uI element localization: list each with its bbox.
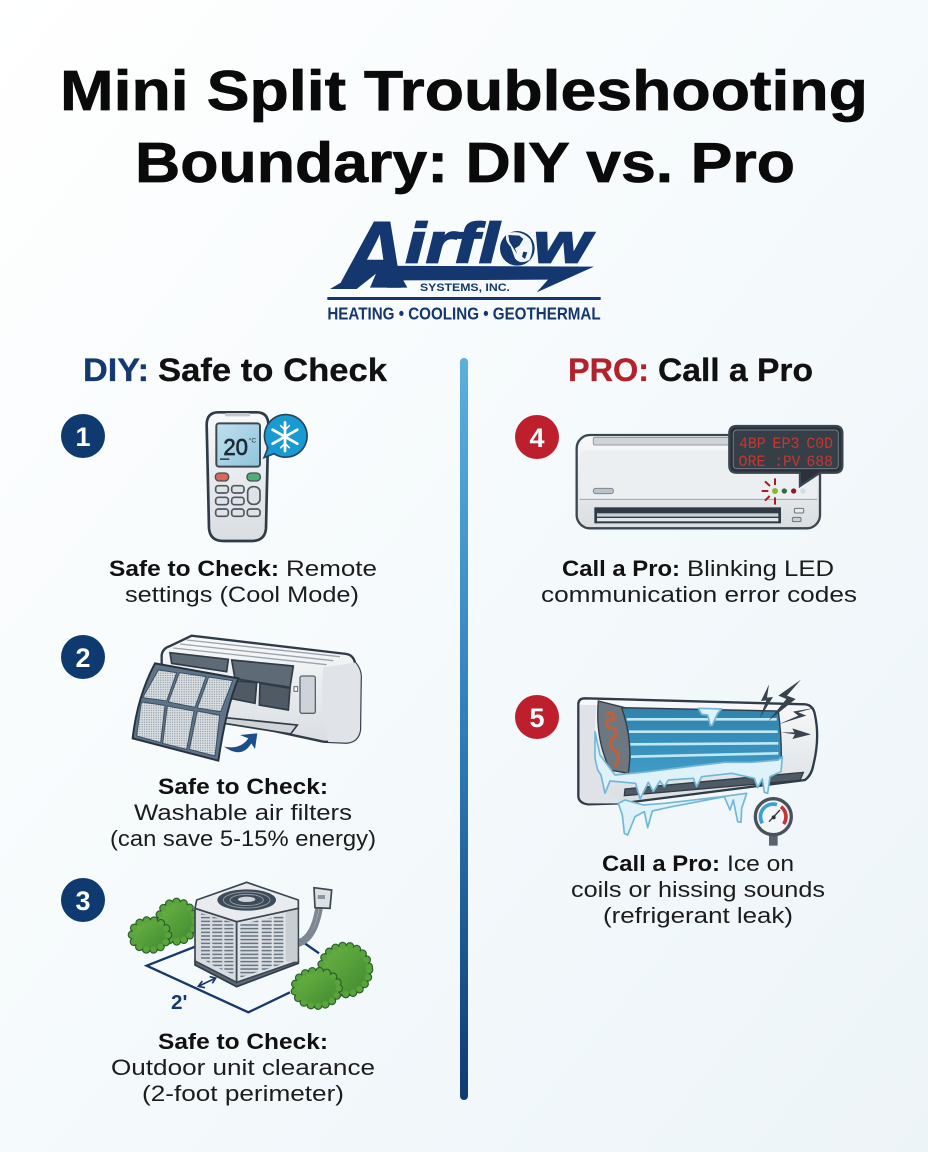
arrow: filter direction — [224, 733, 257, 752]
text: remote settings — [109, 556, 377, 607]
text: ice and hissing: Call a Pro: — [602, 851, 720, 876]
text: ice and hissing: (refrigerant leak) — [603, 903, 793, 928]
badge 3: 3 — [75, 886, 91, 916]
badge 1 — [61, 414, 105, 458]
text: error codes: communication error codes — [541, 582, 857, 607]
panel: item 4 error codes — [515, 415, 857, 607]
callout: LED error display: :PV — [774, 453, 801, 471]
icon: outdoor condenser with clearance — [132, 882, 369, 1014]
title: Mini Split Troubleshooting — [60, 59, 868, 123]
text: ice and hissing: coils or hissing sounds — [571, 877, 825, 902]
title — [60, 59, 868, 195]
text: air filters: Washable air filters — [134, 800, 352, 825]
heading: PRO: PRO: — [568, 352, 649, 388]
icon: indoor unit with LED codes — [577, 426, 842, 528]
heading: DIY — [83, 352, 387, 388]
badge 4: 4 — [529, 423, 545, 453]
text: error codes: Call a Pro: — [562, 556, 680, 581]
text: outdoor clearance: Safe to Check: — [158, 1029, 328, 1054]
logo: Airflow Systems: w — [533, 213, 596, 276]
heading: PRO — [568, 352, 813, 388]
callout: LED error display: C0D — [806, 435, 833, 453]
icon: iced coil unit with gauge — [578, 680, 817, 846]
text: remote settings: Safe to Check: — [109, 556, 279, 581]
badge 2: 2 — [75, 643, 91, 673]
text: air filters: (can save 5-15% energy) — [110, 826, 376, 851]
icon: hissing bolts — [760, 680, 816, 739]
logo: Airflow Systems — [327, 202, 601, 323]
icon: remote with snowflake: 20 — [223, 434, 248, 460]
text: ice and hissing — [571, 851, 825, 928]
icon: filter and indoor unit — [133, 636, 361, 761]
logo: Airflow Systems: SYSTEMS, INC. — [420, 282, 510, 294]
text: remote settings: settings (Cool Mode) — [125, 582, 359, 607]
badge 1: 1 — [75, 422, 91, 452]
heading: DIY: DIY: — [83, 352, 149, 388]
text: outdoor clearance: (2-foot perimeter) — [142, 1081, 344, 1106]
panel: item 5 ice and hissing — [515, 680, 825, 928]
heading: DIY: Safe to Check — [158, 352, 387, 388]
logo: Airflow Systems: A — [339, 202, 407, 308]
title: Boundary: DIY vs. Pro — [135, 131, 795, 195]
icon: remote with snowflake — [207, 412, 307, 541]
callout: LED error display — [729, 426, 842, 486]
heading: PRO: Call a Pro — [658, 352, 813, 388]
text: air filters — [110, 774, 376, 851]
callout: LED error display: ORE — [738, 453, 766, 471]
panel: item 2 air filters — [61, 635, 376, 851]
badge 3 — [61, 878, 105, 922]
badge 5: 5 — [529, 703, 545, 733]
panel: item 3 outdoor unit — [61, 878, 375, 1106]
text: ice and hissing: Ice on — [727, 851, 794, 876]
callout: LED error display: 4BP — [739, 435, 766, 453]
icon: pressure gauge — [755, 799, 791, 846]
text: error codes: Blinking LED — [687, 556, 834, 581]
badge 2 — [61, 635, 105, 679]
icon: outdoor condenser with clearance: 2' — [171, 991, 187, 1014]
callout: LED error display: 688 — [806, 453, 833, 471]
text: outdoor clearance: Outdoor unit clearance — [111, 1055, 375, 1080]
icon: remote with snowflake: °C — [249, 436, 256, 444]
logo: Airflow Systems: HEATING • COOLING • GEOTHERMAL — [327, 303, 601, 323]
text: remote settings: Remote — [286, 556, 377, 581]
icon: blinking status lights — [762, 478, 806, 505]
badge 4 — [515, 415, 559, 459]
logo: Airflow Systems: irfl — [405, 213, 501, 276]
ice build-up — [595, 708, 782, 799]
panel: item 1 remote settings — [61, 412, 377, 607]
text: air filters: Safe to Check: — [158, 774, 328, 799]
text: error codes — [541, 556, 857, 607]
text: outdoor clearance — [111, 1029, 375, 1106]
center divider — [460, 358, 468, 1100]
callout: LED error display: EP3 — [772, 435, 800, 453]
badge 5 — [515, 695, 559, 739]
